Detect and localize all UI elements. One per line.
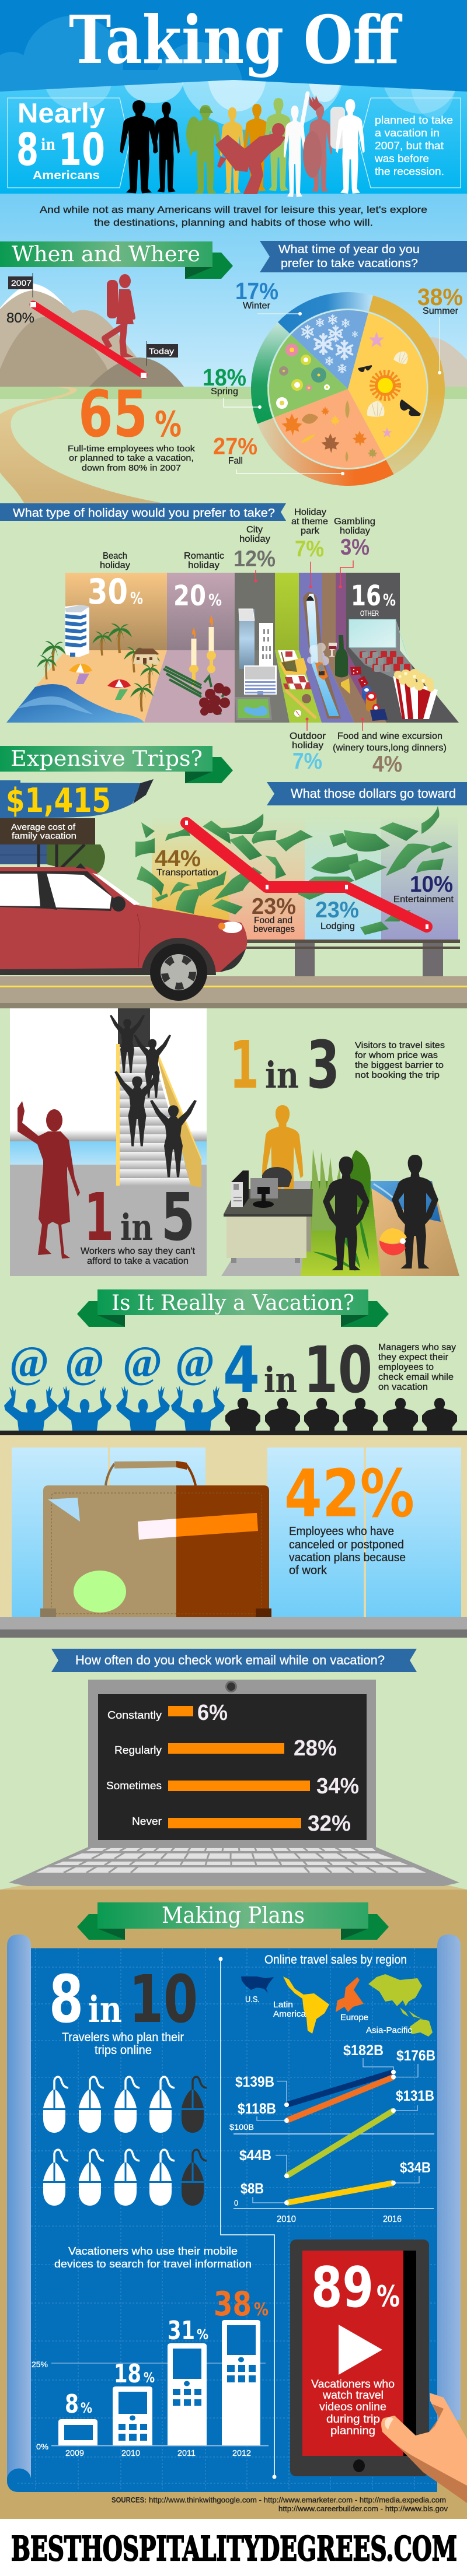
label: food and wine 4% <box>333 717 447 777</box>
stat description: Travelers who plan their <box>62 2031 184 2044</box>
label: theme park 7%: park <box>301 526 320 536</box>
heading: mobile search <box>54 2245 252 2270</box>
tablet with video stat <box>290 2239 429 2476</box>
keyboard <box>36 1848 426 1873</box>
at signs: @ <box>9 1338 49 1387</box>
phone bar 2010 <box>113 2359 155 2458</box>
label: transportation 44%: 44% <box>155 846 201 871</box>
stat 1 in 5: 1 <box>84 1180 114 1256</box>
label: food and wine 4%: Food and wine excursion <box>337 731 442 741</box>
phone bar 2010: 2010 <box>121 2448 140 2458</box>
surfboard cost plate <box>0 779 154 844</box>
stat 4 in 10: 4 <box>223 1333 260 1407</box>
label: gambling 3%: Gambling <box>334 517 375 527</box>
label: food and wine 4%: (winery tours,long dinners) <box>333 743 447 753</box>
value labels: $8B <box>241 2181 264 2197</box>
stat 1 in 3: 1 <box>229 1028 259 1103</box>
phone bar 2012: 2012 <box>232 2448 251 2458</box>
at signs: @ <box>65 1338 104 1387</box>
tall grass and bush <box>311 1149 371 1271</box>
sources: SOURCES: <box>111 2496 147 2504</box>
stat 8 in 10 <box>49 1962 198 2038</box>
stat description: trips online <box>95 2044 152 2057</box>
stat 89%: % <box>377 2280 400 2314</box>
series: Asia-Pacific <box>284 2108 396 2178</box>
stat description: check email while <box>378 1372 454 1382</box>
label: outdoor 7%: 7% <box>292 749 322 774</box>
flying money <box>135 806 452 935</box>
label: romantic 20% <box>173 551 224 612</box>
label: entertainment 10% <box>393 872 454 905</box>
label: food 23% <box>252 894 296 934</box>
section: is it really a vacation <box>0 1289 467 1638</box>
stat 1 in 3: 3 <box>306 1028 340 1103</box>
winding road <box>0 387 161 503</box>
intro text <box>40 204 427 228</box>
stat 1 in 3: in <box>265 1054 299 1096</box>
distant right hill <box>412 337 467 387</box>
callout: planned to take a vacation: was before <box>374 153 429 164</box>
stat description <box>355 1040 445 1080</box>
question banner: time of year: prefer to take vacations? <box>281 257 418 270</box>
stat 8 in 10: 8 <box>49 1962 83 2038</box>
middle mountain <box>0 317 116 387</box>
label: city 12%: 12% <box>234 546 276 572</box>
value labels: $176B <box>396 2048 435 2064</box>
floor <box>0 1617 467 1638</box>
label: gambling 3%: 3% <box>340 535 370 560</box>
row: constantly: Constantly <box>107 1709 162 1721</box>
stat description: the biggest barrier to <box>355 1060 444 1070</box>
section banner: making plans: Making Plans <box>162 1902 305 1928</box>
3D columns <box>6 573 459 723</box>
row: regularly: 28% <box>294 1736 337 1761</box>
waving person <box>18 1101 80 1259</box>
audience silhouettes <box>225 1398 457 1431</box>
label: transportation 44% <box>155 846 218 878</box>
people holding at signs <box>4 1386 225 1431</box>
ground below crowd and sky gradient <box>0 194 467 387</box>
slice: winter <box>291 310 368 389</box>
section banner: expensive trips: Expensive Trips? <box>11 747 203 771</box>
label: fall 27% <box>213 433 344 475</box>
cloud on dark sky <box>0 16 243 133</box>
callout: Nearly 8 in 10 Americans: 8 <box>16 124 39 176</box>
roof luggage <box>0 844 105 873</box>
label: romantic 20%: Romantic <box>184 551 224 561</box>
city scene <box>235 609 277 720</box>
label: transportation 44%: Transportation <box>156 868 218 878</box>
label: winter 17%: 17% <box>235 278 278 304</box>
stat description: they expect their <box>378 1352 448 1362</box>
slice: summer <box>348 313 427 458</box>
slice: fall <box>274 389 385 468</box>
section: how often check email <box>0 1649 467 2519</box>
phone bar 2009: 2009 <box>65 2448 84 2458</box>
label: spring 18% <box>203 364 262 409</box>
red car <box>0 863 247 1001</box>
callout: Nearly 8 in 10 Americans: Nearly <box>18 97 105 128</box>
stat 42%: 42% <box>284 1456 414 1532</box>
decline line from 80% to 65% <box>30 302 147 378</box>
label: lodging 23%: Lodging <box>320 921 355 931</box>
label: spring 18%: 18% <box>203 364 246 391</box>
heading: mobile search: Vacationers who use their mobile <box>68 2245 238 2257</box>
callout: planned to take a vacation <box>359 98 461 188</box>
label: food 23%: beverages <box>253 924 295 934</box>
stat 1 in 5: in <box>120 1206 153 1249</box>
section banner: is it really a vacation: Is It Really a Vacation? <box>111 1291 354 1315</box>
leader lines <box>253 2058 419 2203</box>
beach ball <box>379 1228 407 1255</box>
snow capped mountain <box>0 283 65 310</box>
map: Latin America <box>273 1976 329 2034</box>
declining spend line <box>185 821 428 929</box>
row: never: Never <box>132 1816 162 1827</box>
section: when and where <box>0 241 467 503</box>
callout: planned to take a vacation: planned to take <box>375 114 453 126</box>
bar chart: email frequency <box>106 1701 359 1836</box>
label: outdoor 7%: holiday <box>292 741 323 751</box>
question banner: time of year: What time of year do you <box>278 243 420 256</box>
theme park flume <box>303 592 341 719</box>
slice: spring <box>269 335 348 418</box>
stat description <box>289 1525 406 1577</box>
phone bar 2009: 8 <box>65 2389 79 2419</box>
heading: online travel sales: Online travel sales by region <box>264 1953 407 1967</box>
value labels: $139B <box>235 2074 274 2090</box>
question banner: type of holiday <box>0 503 286 521</box>
stat description: Workers who say they can't <box>81 1246 196 1256</box>
phone bar 2009 <box>58 2389 97 2458</box>
panel: 1 in 5 <box>10 1008 207 1276</box>
question banner: check email: How often do you check work email while on vacation? <box>75 1653 385 1667</box>
flag 2007: 2007 <box>11 278 32 288</box>
blueprint scroll <box>7 1934 461 2492</box>
stat description: planning <box>330 2425 375 2437</box>
beach scene <box>6 605 160 723</box>
value labels: $44B <box>239 2147 271 2164</box>
label: summer 38%: Summer <box>423 306 459 316</box>
callout: Nearly 8 in 10 Americans: 10 <box>58 124 105 176</box>
map: Latin America: America <box>273 2009 306 2019</box>
map: Asia-Pacific <box>366 1974 433 2037</box>
label: entertainment 10%: 10% <box>410 872 453 897</box>
label: theme park 7%: 7% <box>295 537 324 562</box>
phone bar 2011: 2011 <box>177 2448 196 2458</box>
surfboard cost plate: $1,415 <box>6 781 111 820</box>
stat 1 in 3 <box>229 1028 340 1103</box>
row: never <box>132 1811 351 1836</box>
label: other 16%: OTHER <box>360 609 379 618</box>
stat description <box>81 1246 196 1266</box>
row: never: 32% <box>308 1811 351 1836</box>
sources <box>111 2496 448 2513</box>
label: outdoor 7% <box>290 717 326 774</box>
cinema scene <box>349 619 413 682</box>
surfboard cost plate: family vacation <box>12 831 76 841</box>
stat description: or planned to take a vacation, <box>69 453 194 463</box>
title: Taking Off <box>69 1 402 79</box>
label: beach 30%: Beach <box>103 551 127 561</box>
panel: 1 in 3 <box>221 1028 459 1276</box>
food and wine <box>329 635 350 694</box>
axes: 2010 <box>277 2214 296 2224</box>
stat description: vacation plans because <box>289 1551 406 1564</box>
stat 8 in 10: 10 <box>129 1962 198 2038</box>
question banner: type of holiday: What type of holiday would you prefer to take? <box>13 507 275 520</box>
phone bar chart <box>32 2285 269 2458</box>
stat description: Visitors to travel sites <box>355 1040 445 1050</box>
value labels: $118B <box>238 2101 276 2117</box>
section banner: expensive trips <box>0 746 233 783</box>
label: lodging 23%: 23% <box>315 898 359 923</box>
value labels: $34B <box>400 2160 431 2176</box>
label: summer 38%: 38% <box>417 283 463 310</box>
label: winter 17%: Winter <box>243 301 271 311</box>
phone bar 2012: 38 <box>214 2285 252 2323</box>
callout: planned to take a vacation: the recession. <box>375 166 444 177</box>
stat description <box>378 1343 456 1392</box>
sources: http://www.thinkwithgoogle.com - http://www.emarketer.com - http://media.expedia.com <box>149 2496 446 2504</box>
label: beach 30%: % <box>130 588 143 608</box>
axes: 25% <box>32 2360 48 2369</box>
stat description: not booking the trip <box>355 1070 440 1080</box>
label: theme park 7% <box>291 507 328 588</box>
billboard columns <box>152 816 458 940</box>
stat 1 in 5: 5 <box>161 1180 195 1256</box>
hiker figure <box>104 274 134 358</box>
series: Latin America <box>284 2181 396 2205</box>
label: food 23%: 23% <box>252 894 296 919</box>
stat description: on vacation <box>378 1382 428 1392</box>
stat description: Managers who say <box>378 1343 456 1352</box>
stat 65%: % <box>155 404 182 445</box>
row: regularly: Regularly <box>114 1744 162 1756</box>
section banner: when and where: When and Where <box>12 243 200 267</box>
stat description: afford to take a vacation <box>87 1256 189 1266</box>
section banner: is it really a vacation <box>77 1289 389 1327</box>
romantic scene <box>163 615 231 716</box>
stat description: Employees who have <box>289 1525 394 1538</box>
gambling dice and chips <box>350 667 388 721</box>
row: sometimes: Sometimes <box>106 1780 162 1792</box>
label: entertainment 10%: Entertainment <box>393 895 454 905</box>
callout: Nearly 8 in 10 Americans <box>8 97 130 188</box>
callout: Nearly 8 in 10 Americans: Americans <box>33 169 100 182</box>
label: beach 30%: 30 <box>88 572 128 612</box>
question banner: dollars: What those dollars go toward <box>291 786 456 801</box>
near hill <box>89 358 184 387</box>
outer rings <box>369 296 445 474</box>
section: barriers <box>10 1008 459 1276</box>
series: Europe <box>284 2075 396 2123</box>
row: sometimes: 34% <box>316 1774 359 1799</box>
label: city 12%: holiday <box>239 534 270 544</box>
phone bar 2012: % <box>254 2300 269 2320</box>
row: constantly <box>107 1701 228 1725</box>
map: Europe: Europe <box>340 2013 368 2023</box>
row: regularly <box>114 1736 337 1761</box>
label: city 12% <box>234 525 276 582</box>
flag today: Today <box>149 346 174 356</box>
road <box>0 976 467 1008</box>
airport wall <box>0 1435 467 1617</box>
windows <box>12 1448 461 1617</box>
ground stripe <box>0 387 467 399</box>
label: theme park 7%: at theme <box>291 517 328 527</box>
stat 1 in 5 <box>84 1180 195 1256</box>
stat description: Full-time employees who took <box>68 444 196 454</box>
stat description: Vacationers who <box>311 2378 395 2391</box>
stat description: watch travel <box>322 2389 384 2402</box>
stat description <box>311 2378 395 2437</box>
at signs: @ <box>175 1338 215 1387</box>
footer <box>0 2519 467 2576</box>
label: gambling 3%: holiday <box>340 526 370 536</box>
orange worker <box>262 1105 303 1233</box>
suitcase <box>40 1461 271 1617</box>
map: Latin America: Latin <box>273 2000 293 2010</box>
axes: 0% <box>36 2442 48 2451</box>
at signs: @ <box>123 1338 162 1387</box>
label 80%: 80% <box>6 310 34 326</box>
question banner: dollars <box>267 782 467 805</box>
label: other 16%: 16 <box>351 580 381 612</box>
desk with computer <box>224 1167 313 1263</box>
callout: planned to take a vacation: 2007, but that <box>375 140 444 152</box>
question banner: time of year <box>260 241 467 272</box>
label: fall 27%: Fall <box>228 456 243 466</box>
label: summer 38% <box>417 283 463 374</box>
intro text: And while not as many Americans will travel for leisure this year, let's explore <box>40 204 427 215</box>
label: romantic 20%: 20 <box>173 580 206 612</box>
guardrail <box>246 940 460 976</box>
section: hero <box>0 0 467 387</box>
stat 65%: 65 <box>78 377 148 451</box>
stat 8 in 10: in <box>88 1988 122 2031</box>
phone bar 2011: 31 <box>168 2316 195 2346</box>
table <box>0 1884 467 2519</box>
phone bar 2011: % <box>197 2326 208 2343</box>
axes <box>32 2360 269 2451</box>
popcorn <box>393 669 438 719</box>
season pie chart <box>251 292 445 486</box>
map: Asia-Pacific: Asia-Pacific <box>366 2025 412 2035</box>
stat description: of work <box>289 1564 327 1577</box>
label: romantic 20%: holiday <box>188 560 219 570</box>
flag today <box>147 341 178 366</box>
label: theme park 7%: Holiday <box>294 507 326 517</box>
map: U.S. <box>241 1976 274 2004</box>
label: winter 17% <box>235 278 302 316</box>
section banner: making plans <box>77 1902 389 1940</box>
axes: $100B <box>229 2122 254 2132</box>
mouse pictogram: 8 of 10 <box>43 2077 207 2206</box>
stat 4 in 10: in <box>264 1360 297 1401</box>
callout: Nearly 8 in 10 Americans: in <box>41 136 55 154</box>
hand holding tablet <box>381 2393 467 2503</box>
phone bar 2010: 18 <box>114 2359 141 2389</box>
cheering people on stairs <box>110 1015 197 1177</box>
label: fall 27%: 27% <box>213 433 257 460</box>
axes: 0 <box>234 2198 238 2207</box>
stat 4 in 10 <box>223 1333 372 1407</box>
label: outdoor 7%: Outdoor <box>290 731 326 741</box>
phone bar 2010: % <box>144 2370 155 2386</box>
heading: mobile search: devices to search for travel information <box>54 2258 252 2270</box>
axes: 2016 <box>383 2214 402 2224</box>
stat description: down from 80% in 2007 <box>82 463 181 473</box>
icon: play triangle <box>339 2325 382 2375</box>
at signs <box>9 1338 215 1387</box>
label: beach 30% <box>88 551 143 612</box>
section: making plans <box>7 1902 467 2513</box>
row: constantly: 6% <box>197 1701 228 1725</box>
line chart: online sales <box>229 2042 435 2224</box>
phone bar 2012 <box>214 2285 269 2458</box>
intro text: the destinations, planning and habits of those who will. <box>94 217 373 228</box>
section: expensive trips <box>0 746 467 1008</box>
stat description: employees to <box>378 1362 434 1372</box>
label: spring 18%: Spring <box>211 387 238 397</box>
label: other 16%: % <box>383 590 396 609</box>
stat description <box>68 444 196 473</box>
label: food and wine 4%: 4% <box>372 752 402 777</box>
stat description: for whom price was <box>355 1050 438 1060</box>
stat description: canceled or postponed <box>289 1538 404 1551</box>
label: city 12%: City <box>246 525 263 535</box>
section banner: when and where <box>0 241 233 279</box>
label: gambling 3% <box>334 517 375 588</box>
dark beachgoers <box>323 1155 438 1270</box>
value labels: $131B <box>396 2088 434 2104</box>
laptop <box>9 1680 459 1886</box>
section: holiday types <box>0 503 459 777</box>
callout: planned to take a vacation: a vacation in <box>375 127 440 139</box>
row: sometimes <box>106 1774 359 1799</box>
label: beach 30%: holiday <box>100 560 130 570</box>
axes <box>229 2122 434 2224</box>
sources: http://www.careerbuilder.com - http://www.bls.gov <box>278 2504 448 2513</box>
question banner: check email <box>51 1649 417 1672</box>
stat 89%: 89 <box>311 2256 374 2320</box>
label: romantic 20%: % <box>208 590 222 609</box>
map: U.S.: U.S. <box>245 1995 260 2004</box>
label: food 23%: Food and <box>254 916 292 926</box>
surfboard cost plate: Average cost of <box>11 822 76 832</box>
value labels <box>235 2042 435 2197</box>
phone bar 2011 <box>168 2316 208 2458</box>
stat 4 in 10: 10 <box>304 1333 372 1407</box>
staircase <box>116 1044 201 1187</box>
office and beach floor <box>221 1181 459 1276</box>
value labels: $182B <box>343 2042 384 2059</box>
stat description: during trip <box>326 2413 380 2426</box>
series: U.S. <box>284 2070 396 2107</box>
phone bar 2009: % <box>81 2400 92 2416</box>
stat description <box>62 2031 184 2057</box>
divider line <box>218 1957 277 2479</box>
map: Europe <box>336 1977 368 2023</box>
flag 2007 <box>8 273 33 297</box>
crowd silhouettes <box>120 93 365 197</box>
stat description: videos online <box>319 2401 386 2413</box>
hanging clouds <box>46 80 455 131</box>
outdoor scene <box>278 650 315 717</box>
